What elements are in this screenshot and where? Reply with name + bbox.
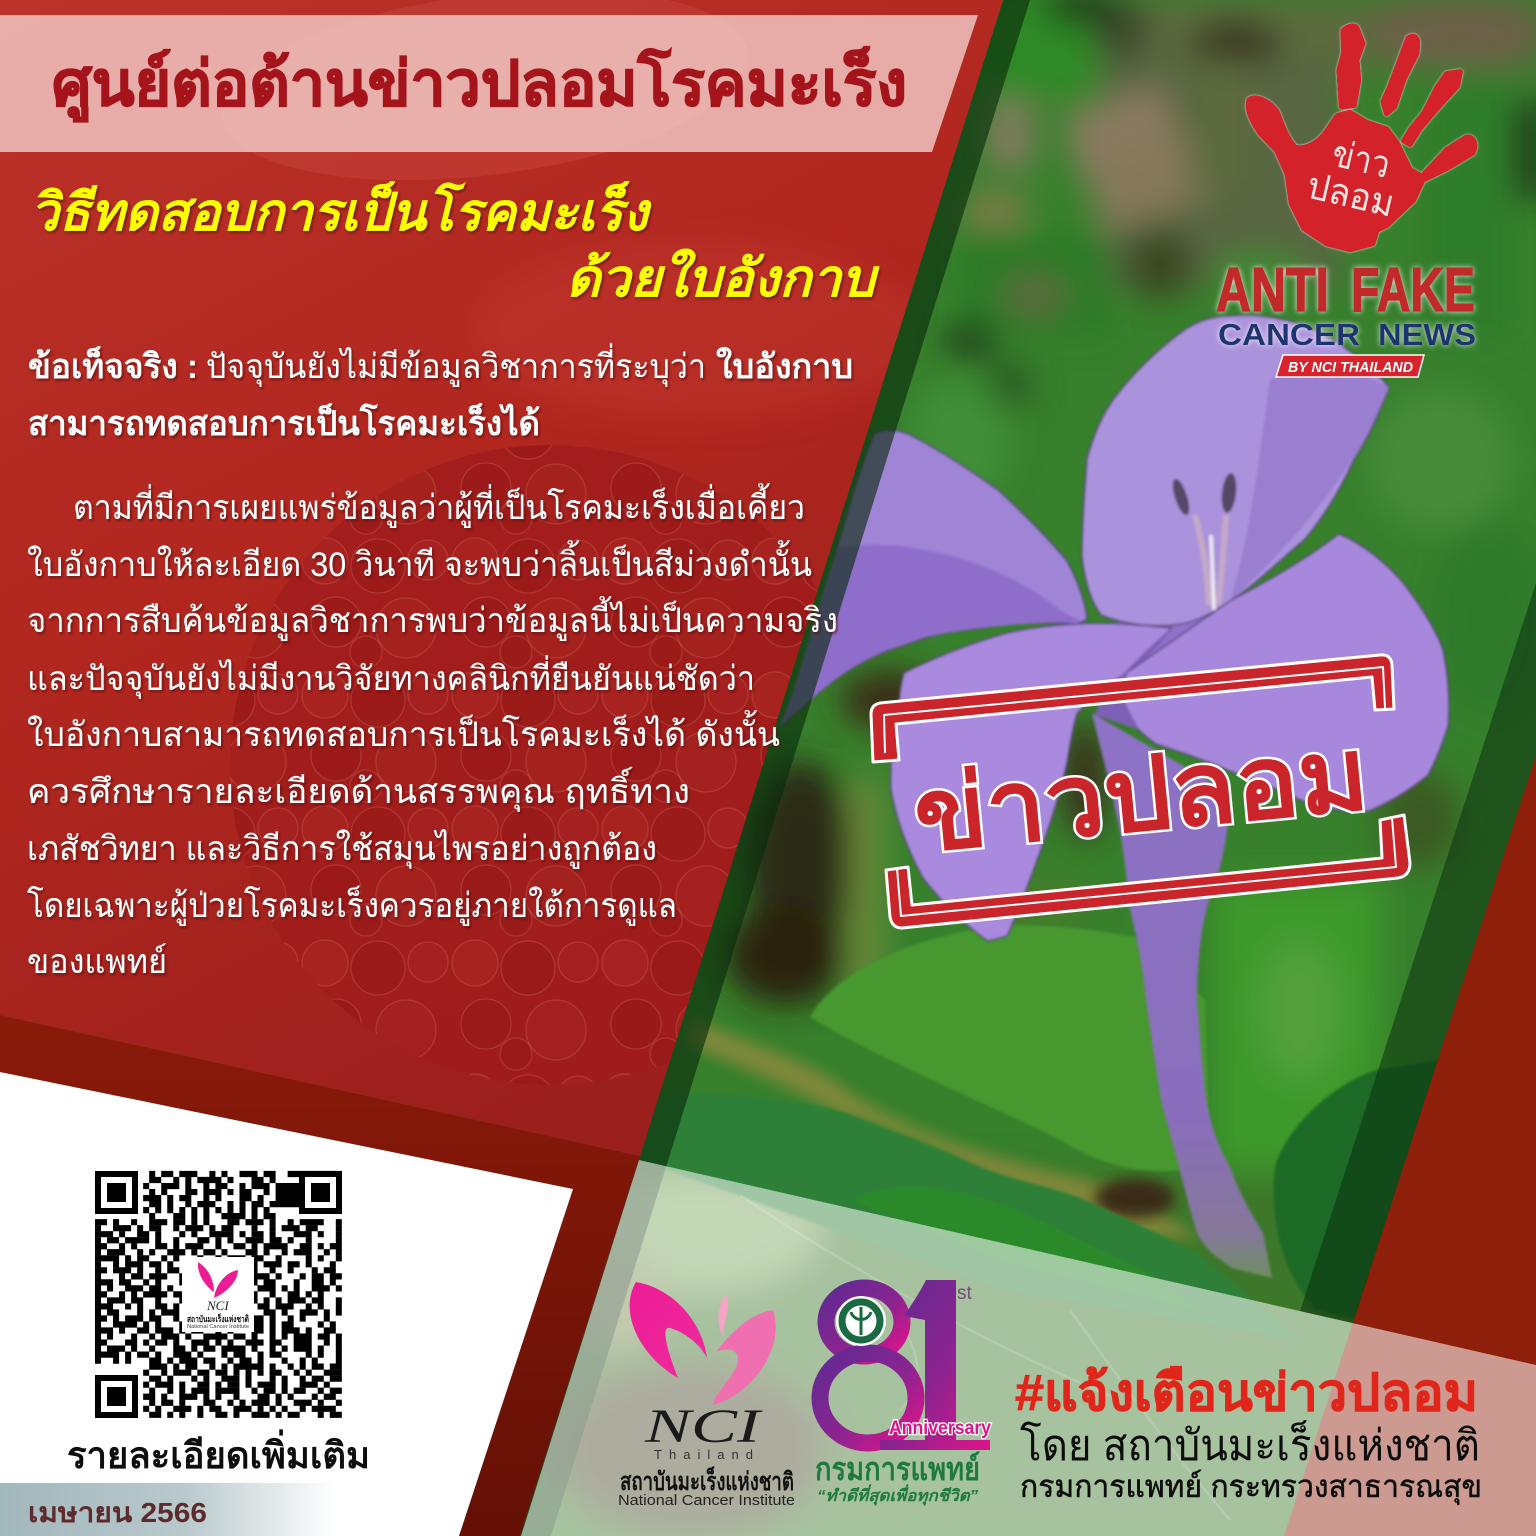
st: st: [957, 1283, 972, 1304]
body paragraph: ควรศึกษารายละเอียดด้านสรรพคุณ ฤทธิ์ทาง: [27, 766, 690, 812]
leaf: lower-right dark: [1274, 1060, 1440, 1320]
QR finder: top right: [299, 1171, 342, 1214]
body paragraph: และปัจจุบันยังไม่มีงานวิจัยทางคลินิกที่ยืนยันแน่ชัดว่า: [27, 655, 755, 699]
stamp top bracket: [871, 655, 1394, 762]
right red wedge: [1284, 755, 1536, 1536]
CANCER NEWS wordmark: CANCER: [1218, 317, 1360, 352]
blood cell backdrop: [252, 0, 712, 180]
right dark strip: [1300, 583, 1536, 1323]
ANTI FAKE wordmark: FAKE: [1351, 256, 1475, 325]
QR centre logo: สถาบันมะเร็งแห่งชาติ: [187, 1312, 249, 1324]
numeral 8: [820, 1288, 916, 1443]
leaf: olive stem band: [690, 1017, 1200, 1240]
footer organisation: โดย สถาบันมะเร็งแห่งชาติ: [1020, 1420, 1480, 1470]
flower throat shading: [1095, 628, 1171, 730]
title band: [0, 15, 978, 152]
upper petal darker side: [1230, 369, 1389, 601]
body paragraph: ใบอังกาบให้ละเอียด 30 วินาที จะพบว่าลิ้นเป็นสีม่วงดำนั้น: [27, 540, 812, 584]
department name: กรมการแพทย์: [815, 1451, 980, 1487]
fact statement: ข้อเท็จจริง :: [28, 345, 198, 386]
ANTI FAKE wordmark: [1216, 256, 1475, 325]
NCI butterfly: [630, 1282, 776, 1405]
flower tube: [1092, 713, 1272, 1278]
leaf: dark gap: [1095, 1178, 1175, 1218]
footer ministry: กรมการแพทย์ กระทรวงสาธารณสุข: [1020, 1469, 1482, 1506]
red main panel: [0, 0, 1003, 1156]
dark diagonal strip: [520, 0, 1030, 1536]
subtitle: ด้วยใบอังกาบ: [566, 248, 880, 308]
QR finder: bottom left: [95, 1375, 138, 1418]
main title: ศูนย์ต่อต้านข่าวปลอมโรคมะเร็ง: [52, 46, 907, 122]
body paragraph: ของแพทย์: [27, 943, 167, 981]
NCI English name: National Cancer Institute: [618, 1492, 795, 1509]
hand label: [1303, 133, 1398, 225]
date band: [0, 1483, 335, 1536]
body paragraph: เภสัชวิทยา และวิธีการใช้สมุนไพรอย่างถูกต้อง: [27, 829, 657, 869]
flower centre: [1077, 596, 1240, 712]
NCI logo: [618, 1282, 795, 1509]
CANCER NEWS wordmark: [1218, 317, 1476, 352]
QR centre logo: [182, 1257, 254, 1332]
NCI Thai name: สถาบันมะเร็งแห่งชาติ: [620, 1466, 794, 1496]
NCI Thailand: Thailand: [654, 1447, 753, 1462]
cancer cell backdrop: [230, 445, 870, 1085]
NCI script: NCI: [644, 1400, 763, 1453]
CANCER NEWS wordmark: NEWS: [1378, 317, 1476, 352]
leaf: centre: [810, 925, 1210, 1171]
body paragraph: จากการสืบค้นข้อมูลวิชาการพบว่าข้อมูลนี้ไม่เป็นความจริง: [27, 596, 838, 641]
Anniversary: Anniversary: [889, 1418, 991, 1439]
slogan: “ทำดีที่สุดเพื่อทุกชีวิต”: [817, 1484, 978, 1506]
leaf: lower: [640, 1093, 1300, 1340]
fake news stamp: [871, 655, 1410, 928]
subtitle: วิธีทดสอบการเป็นโรคมะเร็ง: [30, 181, 652, 242]
hand icon: [1249, 26, 1474, 249]
footer hashtag: #แจ้งเตือนข่าวปลอม: [1015, 1364, 1478, 1421]
fact statement: สามารถทดสอบการเป็นโรคมะเร็งได้: [28, 402, 540, 443]
body paragraph: ใบอังกาบสามารถทดสอบการเป็นโรคมะเร็งได้ ดังนั้น: [27, 710, 780, 754]
body paragraph: ตามที่มีการเผยแพร่ข้อมูลว่าผู้ที่เป็นโรคมะเร็งเมื่อเคี้ยว: [73, 483, 805, 528]
QR code: [95, 1171, 342, 1418]
flower lower-left petal: [891, 623, 1171, 941]
subtitle: [30, 181, 880, 308]
stamens: [1169, 472, 1238, 610]
body paragraph: [27, 483, 838, 981]
fact statement: ปัจจุบันยังไม่มีข้อมูลวิชาการที่ระบุว่า: [206, 343, 706, 387]
anti fake logo: [1216, 26, 1476, 377]
left petal fold: [780, 545, 1082, 726]
fact statement: [28, 343, 853, 443]
body paragraph: โดยเฉพาะผู้ป่วยโรคมะเร็งควรอยู่ภายใต้การดูแล: [27, 885, 677, 926]
QR finder: top left: [95, 1171, 138, 1214]
ANTI FAKE wordmark: ANTI: [1216, 256, 1329, 325]
QR centre logo: National Cancer Institute: [187, 1324, 249, 1330]
stamp text: ข่าวปลอม: [909, 716, 1373, 873]
badge: BY NCI THAILAND: [1288, 359, 1413, 376]
flower: [780, 315, 1449, 1278]
numeral 1: [880, 1280, 990, 1450]
flower upper petal: [1082, 315, 1389, 626]
emblem: [836, 1296, 886, 1346]
leaf: second lower: [851, 1187, 1200, 1310]
date band: เมษายน 2566: [28, 1497, 207, 1528]
81st anniversary logo: [815, 1280, 991, 1506]
flower left petal: [780, 430, 1087, 726]
fact statement: ใบอังกาบ: [716, 346, 853, 386]
white QR panel: [0, 1072, 573, 1536]
hand label: ปลอม: [1303, 165, 1398, 225]
translucent footer panel: [521, 1160, 1536, 1536]
QR centre logo: NCI: [206, 1298, 229, 1313]
badge: [1276, 355, 1424, 377]
stamp bottom bracket: [886, 815, 1410, 928]
hand label: ข่าว: [1328, 133, 1394, 186]
leaf veins under footer: [740, 1195, 1230, 1520]
QR caption: รายละเอียดเพิ่มเติม: [67, 1429, 370, 1476]
flower right petal: [1121, 534, 1449, 811]
lower dark-red band: [0, 1015, 640, 1536]
